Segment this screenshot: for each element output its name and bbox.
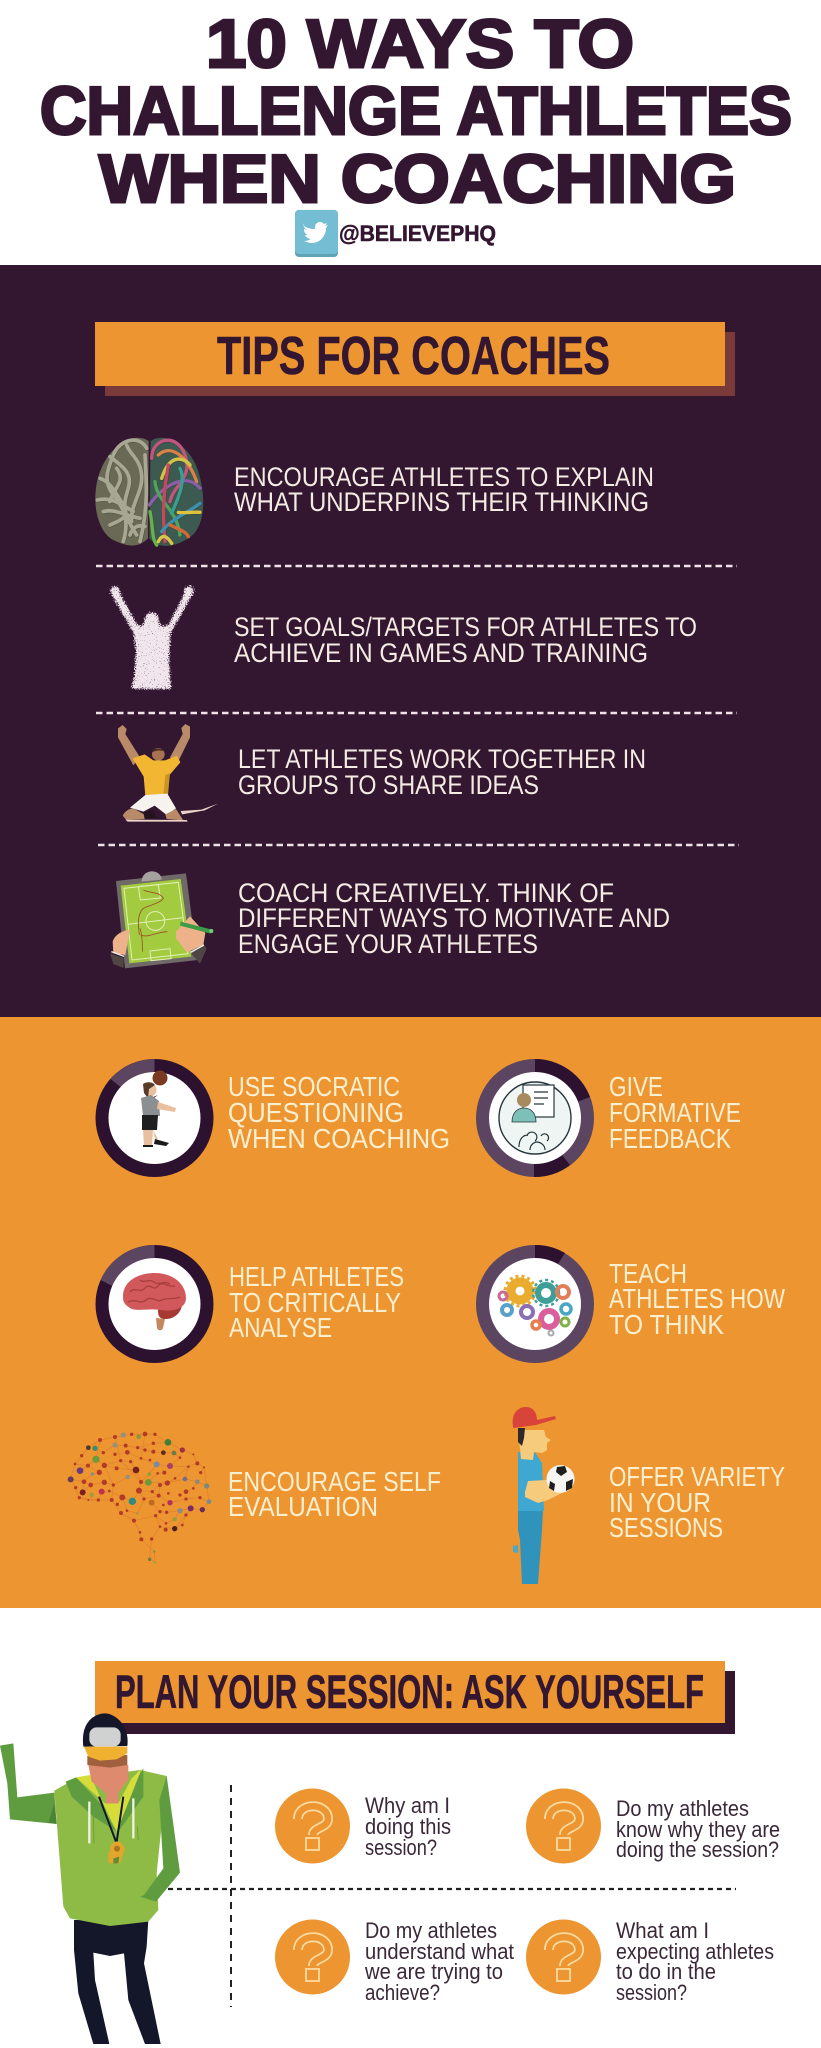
title [40, 6, 792, 217]
question 3 [275, 1918, 514, 2005]
item: formative feedback [476, 1059, 741, 1177]
text: q1 [365, 1793, 451, 1860]
item: teach to think [476, 1245, 785, 1363]
text: variety [609, 1461, 785, 1543]
text: think: TEACH [609, 1258, 687, 1289]
text: feedback: GIVE [609, 1071, 663, 1102]
item: self evaluation [68, 1432, 441, 1564]
text: q2: Do my athletes [616, 1796, 749, 1821]
text: feedback [609, 1071, 741, 1154]
text: tip 4: ENGAGE YOUR ATHLETES [238, 929, 538, 959]
title: CHALLENGE ATHLETES [40, 73, 792, 149]
icon: question mark [526, 1920, 601, 1994]
text: think [609, 1258, 785, 1340]
banner: tips for coaches: TIPS FOR COACHES [217, 326, 610, 386]
text: socratic: QUESTIONING [228, 1097, 404, 1128]
icon: coach with whistle [0, 1713, 180, 2044]
text: q3: Do my athletes [365, 1918, 497, 1943]
text: think: TO THINK [609, 1309, 724, 1340]
text: evaluation: EVALUATION [228, 1491, 378, 1522]
question 2 [526, 1788, 780, 1864]
text: socratic: USE SOCRATIC [228, 1071, 400, 1102]
text: tip 3 [238, 744, 646, 800]
title: WHEN COACHING [99, 141, 736, 217]
text: q4: to do in the [616, 1959, 716, 1984]
text: q1: session? [365, 1835, 437, 1860]
panel: plan your session [0, 1661, 780, 2044]
banner: tips for coaches [95, 322, 735, 396]
icon: question mark [275, 1920, 350, 1994]
text: analyse: ANALYSE [229, 1312, 332, 1343]
icon: tactics clipboard [110, 871, 213, 968]
twitter handle: @BELIEVEPHQ [339, 221, 496, 246]
text: analyse: TO CRITICALLY [229, 1287, 401, 1318]
question 1 [275, 1788, 451, 1864]
text: q3: achieve? [365, 1980, 440, 2005]
text: tip 3: GROUPS TO SHARE IDEAS [238, 770, 539, 800]
text: variety: IN YOUR [609, 1487, 711, 1518]
text: socratic: WHEN COACHING [228, 1123, 450, 1154]
question 4 [526, 1918, 774, 2005]
text: q3: we are trying to [364, 1959, 503, 1984]
text: tip 4: COACH CREATIVELY. THINK OF [238, 878, 614, 908]
text: q4: What am I [616, 1918, 709, 1943]
text: analyse [229, 1261, 404, 1343]
text: evaluation: ENCOURAGE SELF [228, 1466, 441, 1497]
icon: kneeling player [118, 724, 218, 822]
title: 10 WAYS TO [206, 6, 634, 82]
text: tip 2: ACHIEVE IN GAMES AND TRAINING [234, 638, 648, 668]
icon: question mark [275, 1788, 350, 1864]
text: tip 4: DIFFERENT WAYS TO MOTIVATE AND [238, 903, 670, 933]
icon: tangled brain [95, 438, 203, 546]
icon: coach with ball [513, 1407, 574, 1584]
icon: network brain [68, 1432, 211, 1564]
text: tip 3: LET ATHLETES WORK TOGETHER IN [238, 744, 646, 774]
text: evaluation [228, 1466, 441, 1522]
banner: plan your session [95, 1661, 735, 1734]
text: feedback: FEEDBACK [609, 1123, 731, 1154]
text: tip 2 [234, 612, 697, 668]
text: tip 2: SET GOALS/TARGETS FOR ATHLETES TO [234, 612, 697, 642]
text: q4: session? [616, 1980, 687, 2005]
text: q4: expecting athletes [616, 1939, 774, 1964]
text: tip 4 [238, 878, 670, 959]
item: critically analyse [96, 1245, 404, 1363]
text: q3 [364, 1918, 514, 2005]
text: q4 [616, 1918, 774, 2005]
text: q3: understand what [365, 1939, 514, 1964]
item: offer variety [513, 1407, 785, 1584]
item: socratic questioning [96, 1059, 450, 1177]
text: tip 1: ENCOURAGE ATHLETES TO EXPLAIN [234, 462, 654, 492]
text: q2: doing the session? [616, 1837, 779, 1862]
text: q2 [616, 1796, 780, 1862]
text: variety: SESSIONS [609, 1512, 723, 1543]
twitter handle [295, 210, 496, 257]
text: q2: know why they are [616, 1817, 780, 1842]
text: q1: Why am I [365, 1793, 450, 1818]
text: analyse: HELP ATHLETES [229, 1261, 404, 1292]
text: feedback: FORMATIVE [609, 1097, 741, 1128]
text: tip 1 [234, 462, 654, 517]
icon: question mark [526, 1788, 601, 1864]
panel: tips for coaches [0, 265, 821, 1017]
text: tip 1: WHAT UNDERPINS THEIR THINKING [234, 487, 649, 517]
text: socratic [228, 1071, 450, 1154]
panel: orange tips [0, 1017, 821, 1608]
icon: particle athlete [109, 585, 195, 690]
text: q1: doing this [365, 1814, 451, 1839]
